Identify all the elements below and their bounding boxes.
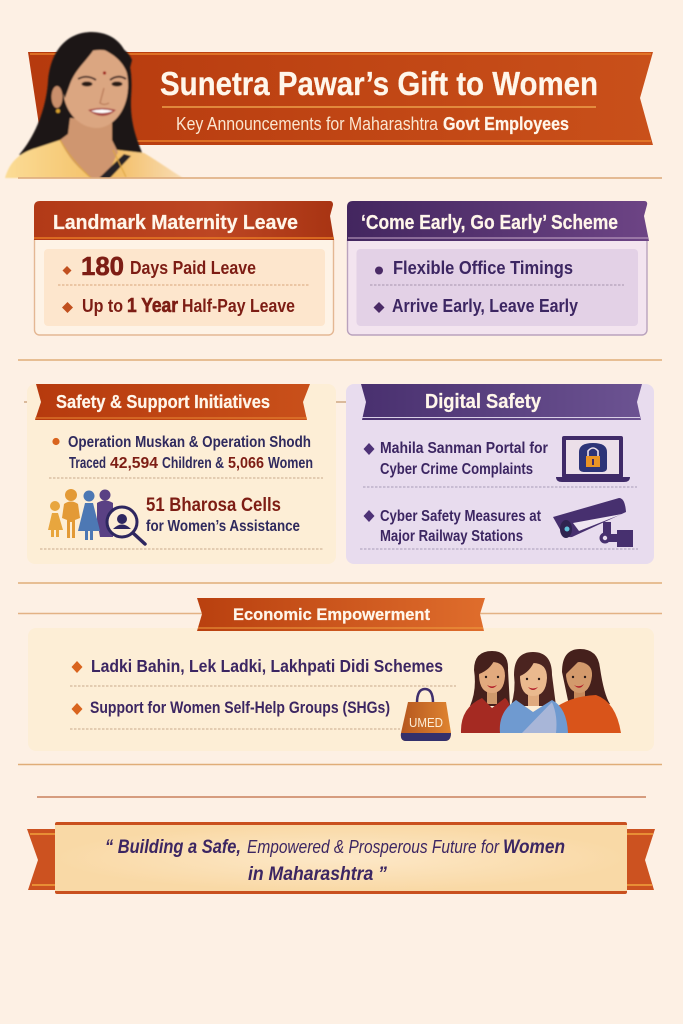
item: half pay	[62, 295, 295, 317]
illustration: three women	[461, 649, 621, 733]
panel: economic empowerment	[28, 598, 654, 751]
item: 180 days: Days Paid Leave	[130, 257, 256, 278]
quote text: Empowered & Prosperous Future for	[247, 837, 500, 857]
item: half pay: Half-Pay Leave	[182, 295, 295, 316]
panel: maternity leave	[34, 201, 334, 335]
divider	[18, 359, 662, 361]
item: cyber safety	[364, 508, 542, 545]
heading: come early: ‘Come Early, Go Early’ Scheme	[361, 212, 618, 234]
bharosa cells	[146, 494, 300, 535]
footer quote banner	[27, 822, 655, 894]
quote text: in Maharashtra ”	[248, 863, 387, 885]
item: operations: 42,594	[110, 455, 158, 472]
ribbon tails	[27, 829, 655, 890]
title: Sunetra Pawar’s Gift to Women	[160, 65, 598, 102]
item: operations	[52, 434, 313, 472]
item: SHGs: Support for Women Self-Help Groups (SHGs)	[90, 699, 390, 717]
portrait	[5, 32, 183, 178]
item: arrive early: Arrive Early, Leave Early	[392, 295, 579, 316]
item: operations: 5,066	[228, 455, 264, 472]
item: mahila sanman: Mahila Sanman Portal for	[380, 440, 548, 457]
divider	[18, 177, 662, 179]
panel: digital safety	[346, 384, 654, 564]
panel: come early go early	[347, 201, 649, 335]
item: 180 days: 180	[81, 251, 124, 281]
item: operations: Women	[268, 455, 313, 472]
woman centre	[500, 652, 568, 733]
heading: digital safety	[361, 384, 642, 420]
divider	[37, 796, 646, 798]
icon: UMED bag	[401, 689, 451, 741]
woman right	[552, 649, 621, 733]
heading: maternity leave	[34, 201, 334, 240]
item: cyber safety: Cyber Safety Measures at	[380, 508, 542, 525]
subtitle: Key Announcements for Maharashtra	[176, 114, 439, 134]
icon: UMED bag: UMED	[409, 716, 443, 730]
item: mahila sanman: Cyber Crime Complaints	[380, 461, 533, 478]
heading: safety: Safety & Support Initiatives	[56, 392, 270, 412]
item: cyber safety: Major Railway Stations	[380, 528, 523, 545]
woman left	[461, 651, 514, 733]
item: half pay: 1 Year	[127, 295, 178, 317]
heading: come early	[347, 201, 649, 241]
item: mahila sanman	[364, 440, 548, 478]
header banner	[28, 52, 653, 145]
bharosa cells: 51 Bharosa Cells	[146, 494, 281, 516]
quote text: Women	[503, 836, 565, 858]
quote text	[105, 836, 565, 885]
item: half pay: Up to	[82, 295, 123, 316]
icon: laptop with lock	[556, 436, 630, 482]
divider with banner gap	[18, 612, 662, 614]
item: operations: Traced	[69, 455, 106, 472]
divider	[18, 764, 662, 766]
item: 180 days	[62, 251, 256, 281]
connector lines	[24, 401, 654, 403]
item: operations: Children &	[162, 455, 224, 472]
heading: economic	[197, 598, 485, 631]
item: schemes: Ladki Bahin, Lek Ladki, Lakhpati Didi Schemes	[91, 656, 443, 676]
heading: economic: Economic Empowerment	[233, 605, 430, 624]
icon: security camera	[553, 498, 633, 547]
subtitle: Govt Employees	[443, 114, 569, 134]
heading: digital safety: Digital Safety	[425, 391, 542, 413]
panel: safety and support	[27, 384, 336, 564]
quote text: “ Building a Safe,	[105, 836, 241, 858]
item: operations: Operation Muskan & Operation Shodh	[68, 434, 311, 451]
icon: family with magnifier	[48, 489, 145, 544]
item: flexible timings: Flexible Office Timings	[393, 257, 573, 278]
divider	[18, 582, 662, 584]
bharosa cells: for Women’s Assistance	[146, 518, 300, 535]
heading: maternity leave: Landmark Maternity Leave	[53, 212, 298, 234]
heading: safety	[35, 384, 310, 420]
